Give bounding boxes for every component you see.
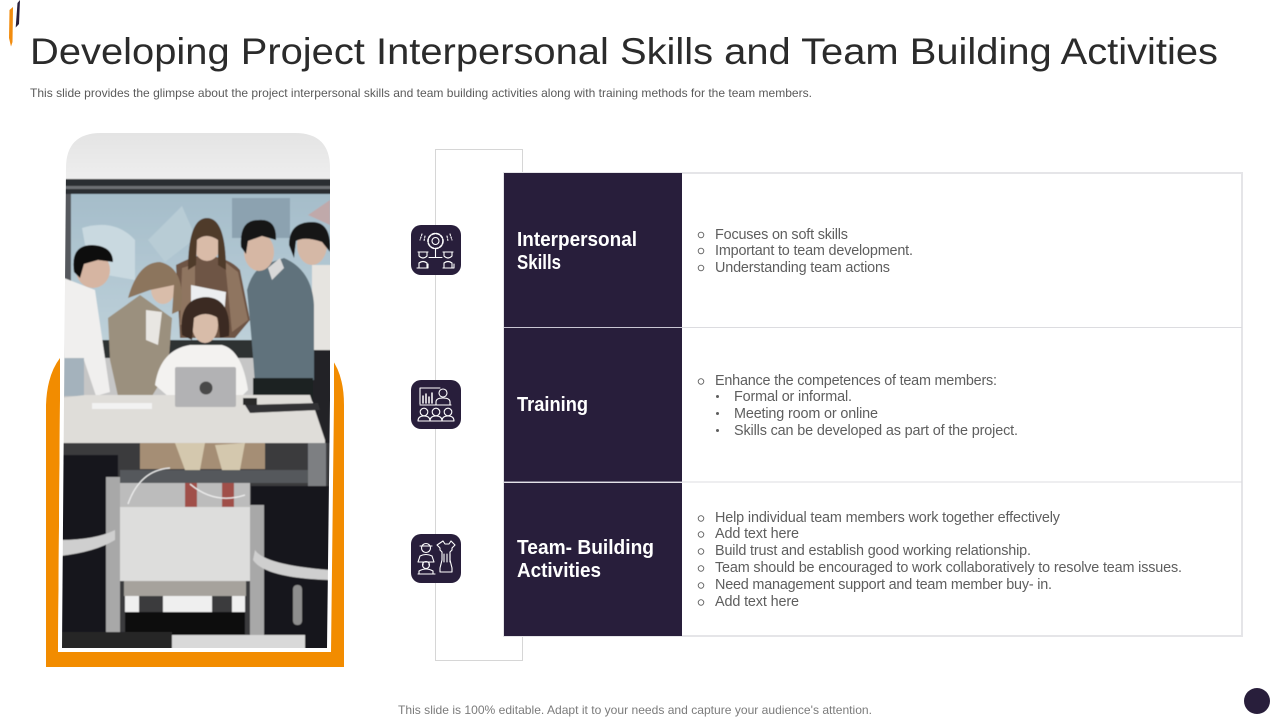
title: Developing Project Interpersonal Skills and Team Building Activities [30,31,1218,72]
row 1: interpersonal skills: Skills [517,252,561,274]
connector bracket [436,150,522,660]
row 2: training: Skills can be developed as part of the project. [734,423,1018,439]
row 1: interpersonal skills: Focuses on soft skills [715,227,848,243]
row 3: team building activities: Team should be encouraged to work collaboratively to resolve team issues. [715,560,1182,576]
footer note: This slide is 100% editable. Adapt it to your needs and capture your audience's attention. [398,703,872,717]
person tan jacket [108,262,182,396]
row 2: training: Enhance the competences of team members: [715,373,997,389]
row 3: team building activities: Need management support and team member buy- in. [715,577,1052,593]
right chair [250,486,330,651]
table outline and dividers [504,173,1242,636]
row 3: team building activities [504,483,1182,636]
photo: team around a laptop [58,129,335,653]
icon: training [411,380,461,429]
orange frame behind photo [46,358,344,667]
row 3: team building activities: Activities [517,560,601,582]
person back woman [176,218,250,338]
row 2: training [504,328,1018,482]
table [60,395,325,443]
left chair [60,455,120,650]
under table [64,442,330,636]
row 1: interpersonal skills: Interpersonal [517,229,637,251]
icon: team building [411,534,461,583]
row 2: training: Meeting room or online [734,406,878,422]
table: skills [504,173,1242,636]
row 1: interpersonal skills: Understanding team actions [715,260,890,276]
row 3: team building activities: Add text here [715,594,799,610]
icon: interpersonal skills [411,225,461,275]
row 3: team building activities: Add text here [715,526,799,542]
laptop [175,367,236,407]
row 2: training: Formal or informal. [734,389,852,405]
logo accent marks [9,0,20,46]
row 3: team building activities: Team- Building [517,537,654,559]
row 1: interpersonal skills [504,173,913,327]
person white shirt left [64,245,113,396]
corner dot [1244,688,1270,714]
person blue shirt [241,220,314,402]
wall and screen [60,130,335,398]
subtitle: This slide provides the glimpse about the project interpersonal skills and team building activities along with training methods for the team members. [30,86,812,100]
person right [289,222,332,450]
seated man [155,297,248,398]
row 3: team building activities: Build trust and establish good working relationship. [715,543,1031,559]
desk panel in foreground [60,507,305,650]
row 1: interpersonal skills: Important to team development. [715,243,913,259]
row 2: training: Training [517,394,588,416]
row 3: team building activities: Help individual team members work together effectively [715,510,1061,526]
